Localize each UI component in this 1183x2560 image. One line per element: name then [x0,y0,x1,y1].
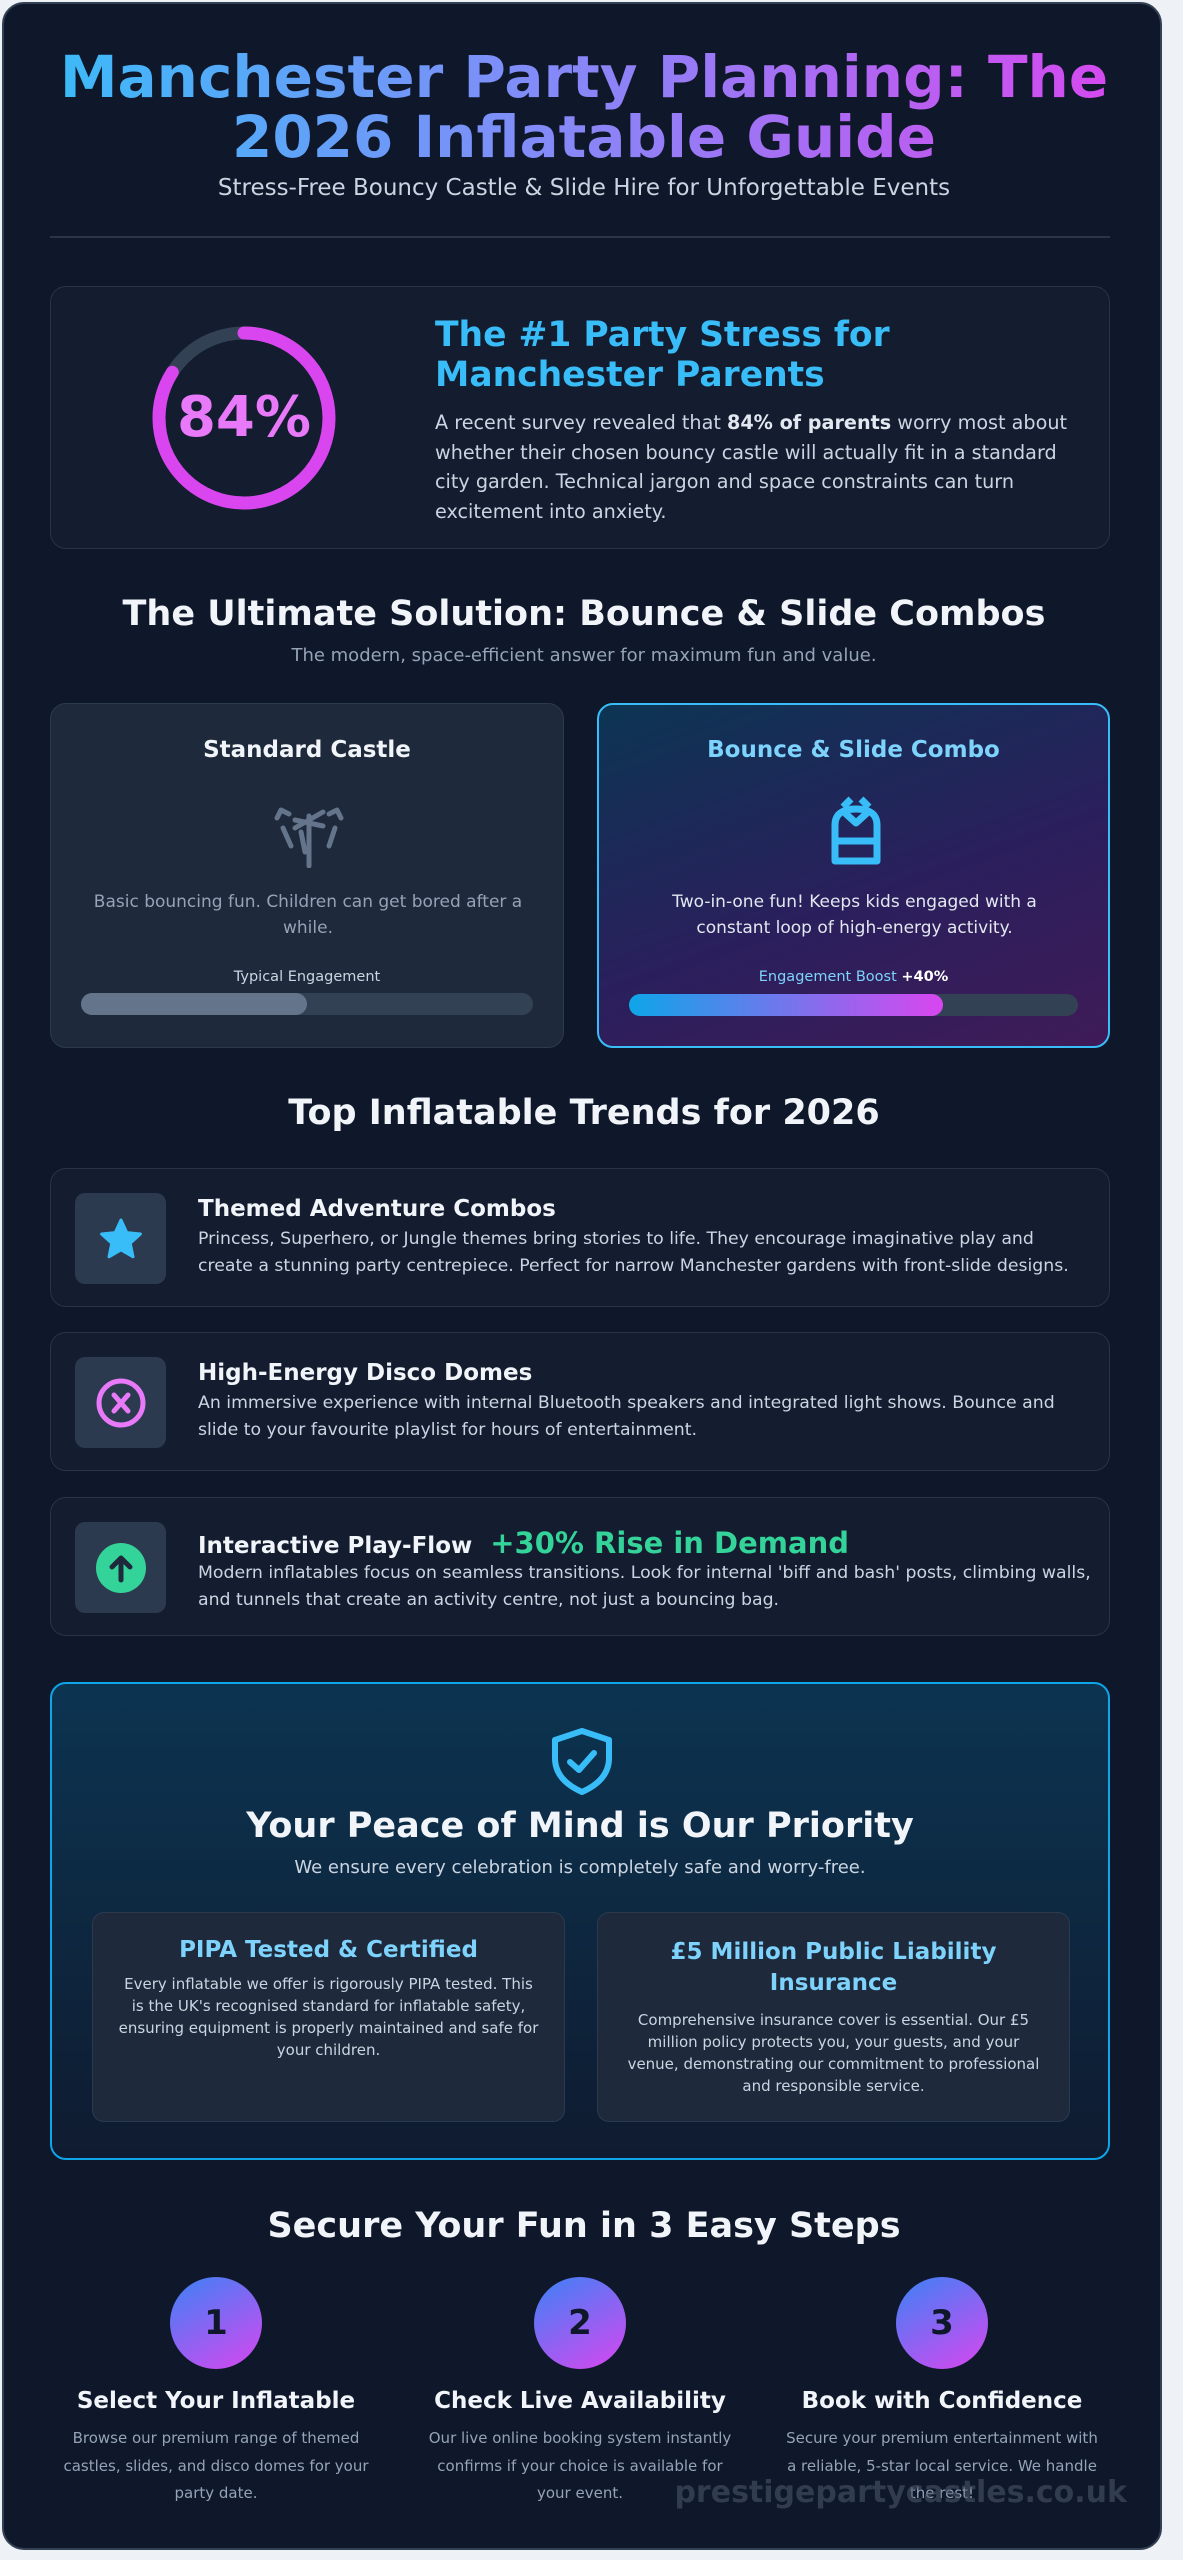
number circle [170,2277,262,2369]
safety subtext: We ensure every celebration is completely safe and worry-free. [294,1857,866,1878]
stat text: A recent survey revealed that 84% of parents worry most about whether their chosen bouncy castle will actually fit in a standard city garden. Technical jargon and space constraints can turn excitement into anxiety. [435,411,1067,522]
icon: x circle [75,1357,166,1448]
step 1 [63,2277,369,2502]
number circle [896,2277,988,2369]
subcard: PIPA: Every inflatable we offer is rigorously PIPA tested. This is the UK's recognised standard for inflatable safety, ensuring equipment is properly maintained and safe for your children. [119,1975,538,2059]
step 3: Secure your premium entertainment with a reliable, 5-star local service. We handle the rest! [786,2429,1098,2502]
heading: solution: The Ultimate Solution: Bounce & Slide Combos [123,594,1045,634]
bar: boost [629,994,1078,1016]
bar: typical [81,993,533,1015]
subheading: The modern, space-efficient answer for maximum fun and value. [291,645,877,666]
watermark: prestigepartycastles.co.uk [674,2475,1127,2510]
title [24,47,1144,167]
heading: trends: Top Inflatable Trends for 2026 [288,1093,880,1133]
step 2 [429,2277,731,2502]
stat heading: Manchester Parents [435,355,825,395]
subcard: insurance: £5 Million Public Liability Insurance [671,1939,996,1996]
subcard: insurance [597,1912,1070,2122]
number circle: 1 [204,2303,228,2343]
card title: Bounce & Slide Combo [707,737,1000,763]
subcard: PIPA [92,1912,565,2122]
heading: steps: Secure Your Fun in 3 Easy Steps [267,2206,901,2246]
title: Manchester Party Planning: The [60,43,1108,111]
card description: Two-in-one fun! Keeps kids engaged with a constant loop of high-energy activity. [672,892,1037,938]
donut chart 84%: 84% [177,385,311,450]
trend text: Princess, Superhero, or Jungle themes bring stories to life. They encourage imaginative play and create a stunning party centrepiece. Perfect for narrow Manchester gardens with front-slide designs. [198,1229,1069,1276]
step 1: Select Your Inflatable [77,2388,355,2414]
icon: combo [832,796,880,864]
panel: safety [50,1682,1110,2160]
trend text: Modern inflatables focus on seamless transitions. Look for internal 'biff and bash' posts, climbing walls, and tunnels that create an activity centre, not just a bouncing bag. [198,1563,1091,1610]
card title: Standard Castle [203,737,411,763]
trend title: Themed Adventure Combos [198,1196,556,1222]
panel: stat [50,286,1110,549]
subcard: PIPA: PIPA Tested & Certified [179,1937,478,1963]
title: 2026 Inflatable Guide [232,103,936,171]
subtitle: Stress-Free Bouncy Castle & Slide Hire for Unforgettable Events [218,175,950,201]
icon: star [75,1193,166,1284]
trend text: An immersive experience with internal Bluetooth speakers and integrated light shows. Bounce and slide to your favourite playlist for hours of entertainment. [198,1393,1055,1440]
card description: Basic bouncing fun. Children can get bored after a while. [94,892,522,938]
label: Engagement Boost +40% [759,969,948,985]
subcard: insurance: Comprehensive insurance cover is essential. Our £5 million policy protects you, your guests, and your venue, demonstrating our commitment to professional and responsible service. [628,2011,1039,2095]
trend title: High-Energy Disco Domes [198,1360,532,1386]
icon: castle [274,808,344,868]
donut chart 84% [152,326,336,510]
trend: play-flow [50,1497,1110,1636]
label: Typical Engagement [234,969,380,985]
trend: disco [50,1332,1110,1471]
step 3 [786,2277,1098,2502]
step 3: Book with Confidence [802,2388,1082,2414]
stat heading [435,315,890,395]
trend: themed [50,1168,1110,1307]
icon: arrow up [75,1522,166,1613]
step 1: Browse our premium range of themed castles, slides, and disco domes for your party date. [63,2429,369,2502]
number circle [534,2277,626,2369]
panel: standard castle [50,703,564,1048]
icon: shield [552,1728,612,1795]
stat heading: The #1 Party Stress for [435,315,890,355]
step 2: Check Live Availability [434,2388,726,2414]
number circle: 3 [930,2303,954,2343]
number circle: 2 [568,2303,592,2343]
panel: bounce & slide combo [597,703,1110,1048]
safety heading: Your Peace of Mind is Our Priority [246,1806,914,1846]
step 2: Our live online booking system instantly confirms if your choice is available for your event. [429,2429,731,2502]
trend title: Interactive Play-Flow +30% Rise in Demand [198,1526,849,1560]
